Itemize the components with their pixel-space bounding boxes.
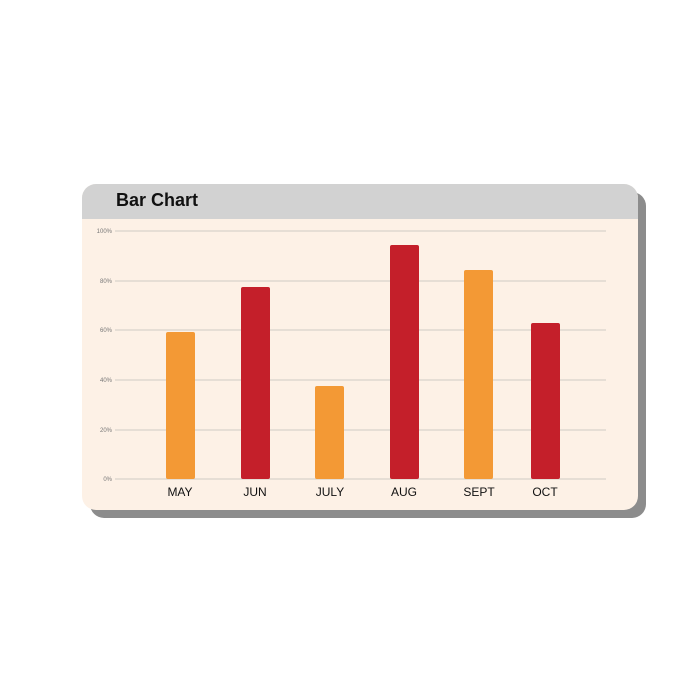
y axis labels: 0%: [103, 477, 113, 483]
panel: bar chart card: [82, 184, 638, 510]
x axis labels: SEPT: [463, 485, 495, 499]
y axis labels: 20%: [100, 428, 113, 434]
y axis labels: 60%: [100, 328, 113, 334]
title: Bar Chart: [116, 190, 198, 210]
y axis labels: 80%: [100, 279, 113, 285]
x axis labels: MAY: [167, 485, 193, 499]
y axis labels: 100%: [97, 229, 113, 235]
x axis labels: AUG: [391, 485, 417, 499]
y axis labels: 40%: [100, 378, 113, 384]
header bar: [82, 184, 638, 219]
x axis labels: JUN: [243, 485, 267, 499]
bars: [166, 245, 560, 479]
x axis labels: JULY: [316, 485, 344, 499]
card shadow: [90, 192, 646, 518]
x axis labels: OCT: [532, 485, 558, 499]
x axis labels: [167, 485, 558, 499]
y axis labels: [97, 229, 113, 483]
